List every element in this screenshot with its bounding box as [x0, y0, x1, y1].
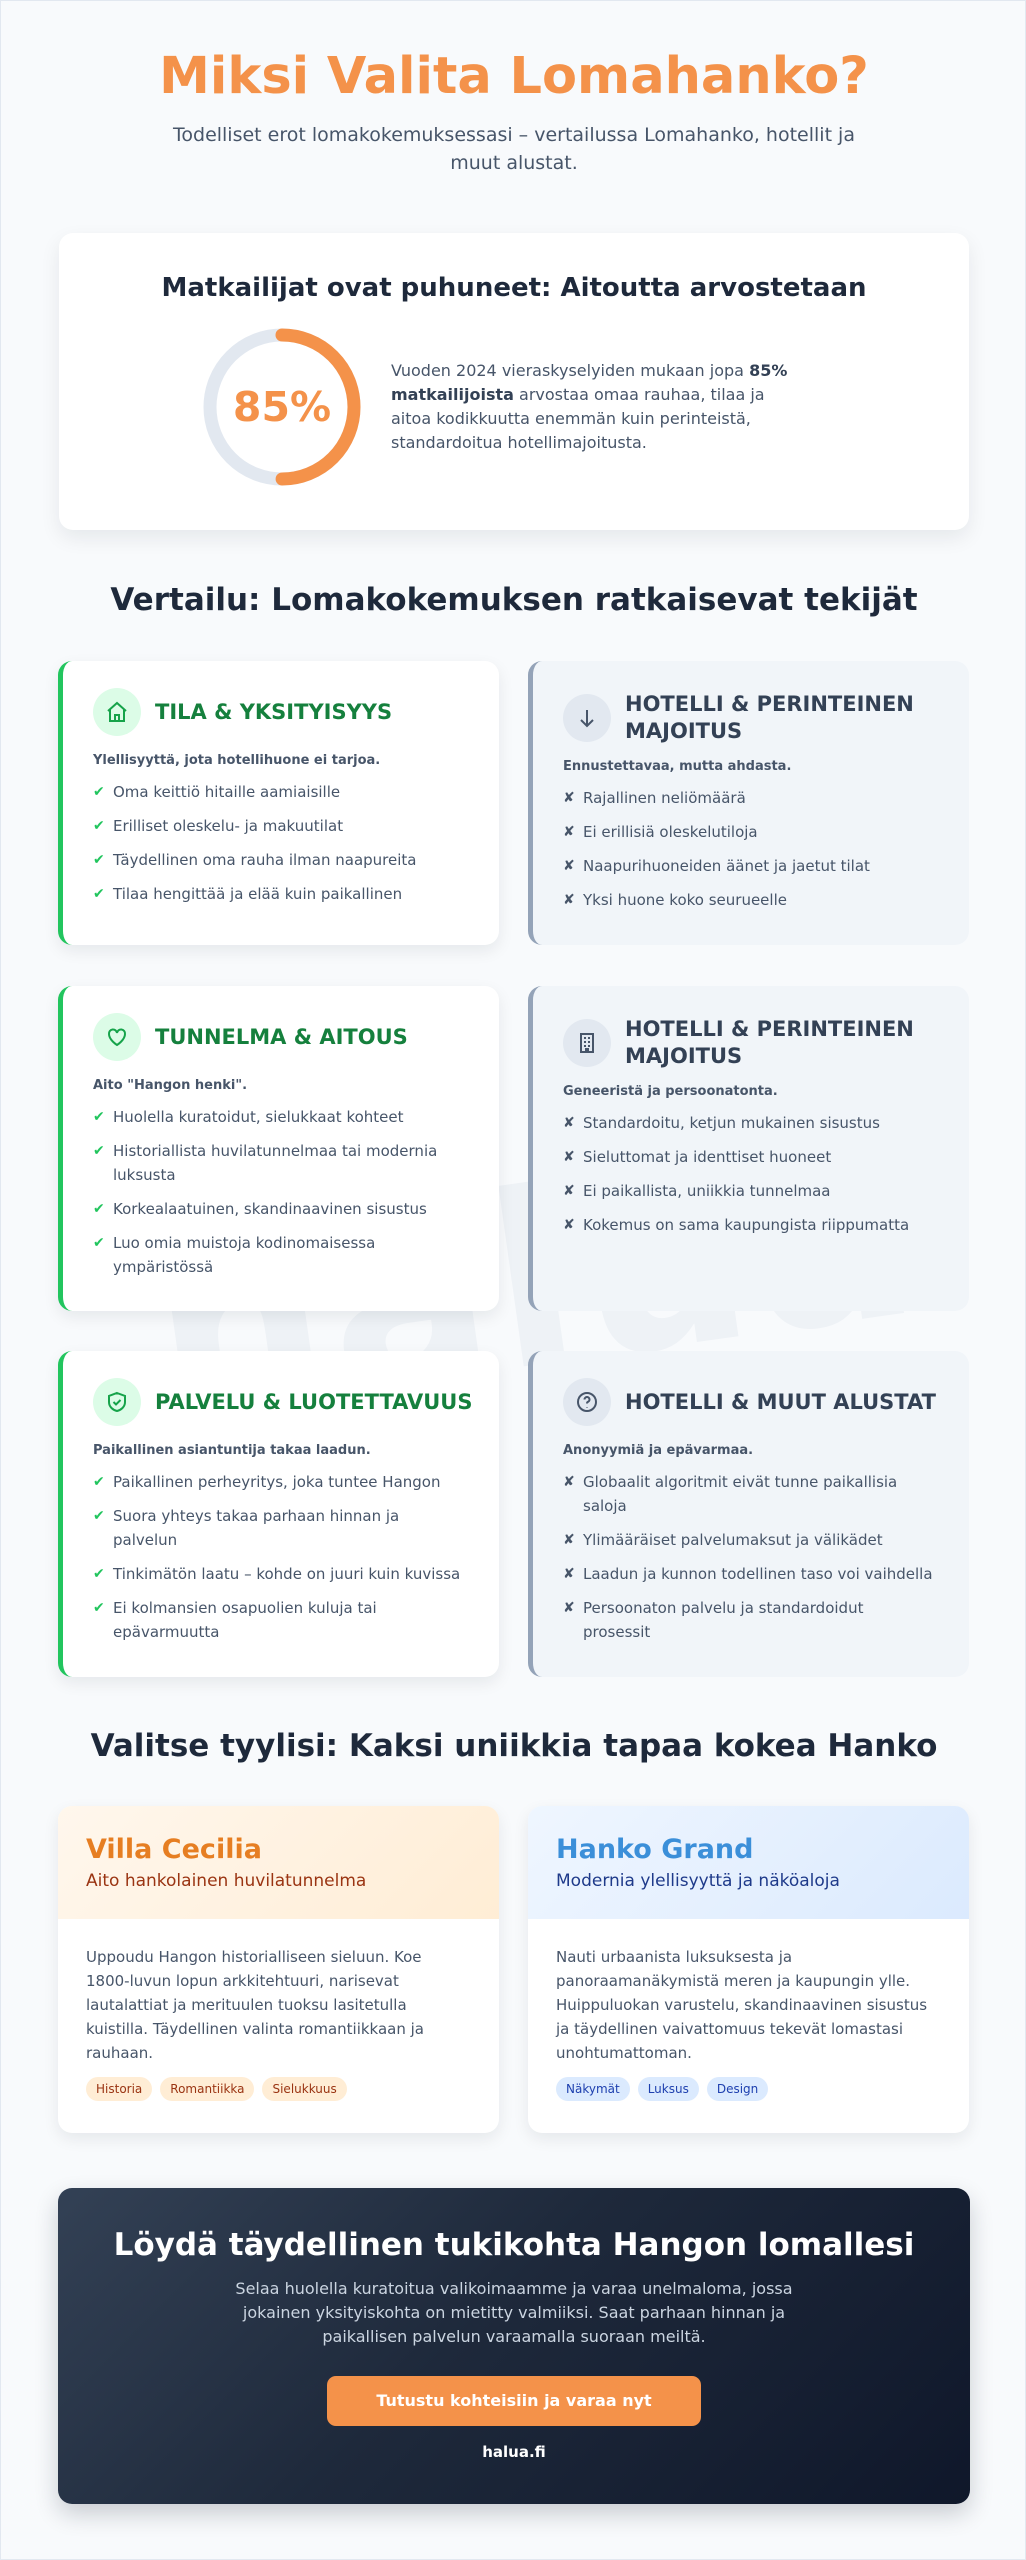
header: [563, 1017, 914, 1068]
panel: tunnelma bad: [528, 986, 969, 1311]
header villa: Aito hankolainen huvilatunnelma: [86, 1871, 366, 1891]
body villa: [86, 1948, 424, 2101]
watermark: halua: [135, 1089, 935, 1473]
body grand: Luksus: [648, 2082, 689, 2096]
subtitle: [172, 124, 855, 174]
panel: palvelu bad: Globaalit algoritmit eivät tunne paikallisia: [583, 1473, 897, 1491]
panel: tunnelma good: Aito "Hangon henki".: [93, 1078, 247, 1093]
panel: palvelu good: epävarmuutta: [113, 1623, 220, 1641]
body grand: Näkymät: [566, 2082, 620, 2096]
donut chart 85%: 85%: [233, 383, 331, 431]
stat text: matkailijoista arvostaa omaa rauhaa, tilaa ja: [391, 385, 765, 404]
header: PALVELU & LUOTETTAVUUS: [155, 1390, 472, 1414]
stat text: standardoitua hotellimajoitusta.: [391, 433, 647, 452]
donut chart 85%: [204, 328, 360, 486]
panel: tila bad: Yksi huone koko seurueelle: [583, 891, 787, 909]
panel: palvelu good: [58, 1351, 499, 1677]
body grand: unohtumattoman.: [556, 2044, 692, 2062]
panel: tila bad: Naapurihuoneiden äänet ja jaetut tilat: [583, 857, 870, 875]
panel: palvelu bad: saloja: [583, 1497, 627, 1515]
title: Miksi Valita Lomahanko?: [159, 47, 869, 106]
panel: palvelu bad: Persoonaton palvelu ja standardoidut: [583, 1599, 863, 1617]
panel: tunnelma good: Huolella kuratoidut, sielukkaat kohteet: [113, 1108, 404, 1126]
panel: Villa Cecilia: [58, 1806, 499, 2133]
stat text: Vuoden 2024 vieraskyselyiden mukaan jopa 85%: [391, 361, 787, 380]
panel: tila good: Ylellisyyttä, jota hotellihuone ei tarjoa.: [93, 753, 380, 768]
panel: tila bad: Rajallinen neliömäärä: [583, 789, 746, 807]
CTA heading: Löydä täydellinen tukikohta Hangon lomallesi: [114, 2227, 914, 2263]
panel: palvelu bad: [528, 1351, 969, 1677]
header grand: [528, 1806, 969, 1919]
header grand: Hanko Grand: [556, 1834, 753, 1865]
stat text: [391, 361, 787, 452]
panel: palvelu bad: Anonyymiä ja epävarmaa.: [563, 1443, 753, 1458]
header villa: Villa Cecilia: [86, 1834, 262, 1865]
header: [563, 1378, 936, 1426]
header: [93, 1013, 408, 1061]
panel: tila bad: [528, 661, 969, 945]
CTA button: [327, 2376, 701, 2426]
brand: halua.fi: [482, 2443, 546, 2461]
CTA text: jokainen yksityiskohta on mietitty valmiiksi. Saat parhaan hinnan ja: [243, 2303, 785, 2322]
body grand: Design: [717, 2082, 758, 2096]
panel: tunnelma bad: Sieluttomat ja identtiset huoneet: [583, 1148, 831, 1166]
panel: tunnelma bad: Standardoitu, ketjun mukainen sisustus: [583, 1114, 880, 1132]
body grand: Nauti urbaanista luksuksesta ja: [556, 1948, 792, 1966]
body villa: Historia: [96, 2082, 142, 2096]
panel: tunnelma bad: Ei paikallista, uniikkia tunnelmaa: [583, 1182, 830, 1200]
body grand: ja täydellinen vaivattomuus tekevät lomastasi: [556, 2020, 903, 2038]
panel: tila bad: Ennustettavaa, mutta ahdasta.: [563, 759, 791, 774]
CTA text: [235, 2279, 793, 2346]
panel: palvelu bad: Ylimääräiset palvelumaksut ja välikädet: [583, 1531, 883, 1549]
panel: palvelu good: palvelun: [113, 1531, 177, 1549]
CTA text: Selaa huolella kuratoitua valikoimaamme ja varaa unelmaloma, jossa: [235, 2279, 793, 2298]
panel: palvelu good: Paikallinen asiantuntija takaa laadun.: [93, 1443, 371, 1458]
panel: Hanko Grand: [528, 1806, 969, 2133]
header: [93, 1378, 472, 1426]
panel: tunnelma good: [58, 986, 499, 1311]
header: TILA & YKSITYISYYS: [155, 700, 392, 724]
panel: tila bad: Ei erillisiä oleskelutiloja: [583, 823, 758, 841]
panel: palvelu good: Ei kolmansien osapuolien kuluja tai: [113, 1599, 377, 1617]
header: HOTELLI & PERINTEINEN: [625, 692, 914, 716]
body villa: Sielukkuus: [272, 2082, 337, 2096]
panel: tila good: Erilliset oleskelu- ja makuutilat: [113, 817, 343, 835]
header: [563, 692, 914, 743]
subtitle: muut alustat.: [450, 152, 578, 174]
section heading: comparison: Vertailu: Lomakokemuksen ratkaisevat tekijät: [110, 582, 918, 618]
stat text: aitoa kodikkuutta enemmän kuin perinteistä,: [391, 409, 751, 428]
header: HOTELLI & PERINTEINEN: [625, 1017, 914, 1041]
body grand: panoraamanäkymistä meren ja kaupungin ylle.: [556, 1972, 910, 1990]
panel: palvelu bad: Laadun ja kunnon todellinen taso voi vaihdella: [583, 1565, 933, 1583]
panel: tunnelma good: Korkealaatuinen, skandinaavinen sisustus: [113, 1200, 427, 1218]
panel: tunnelma good: Luo omia muistoja kodinomaisessa: [113, 1234, 375, 1252]
header: [93, 688, 392, 736]
body villa: rauhaan.: [86, 2044, 153, 2062]
panel: tunnelma good: luksusta: [113, 1166, 176, 1184]
panel: tila good: Oma keittiö hitaille aamiaisille: [113, 783, 340, 801]
header grand: Modernia ylellisyyttä ja näköaloja: [556, 1871, 840, 1891]
panel: palvelu bad: prosessit: [583, 1623, 650, 1641]
section heading: styles: Valitse tyylisi: Kaksi uniikkia tapaa kokea Hanko: [91, 1728, 937, 1764]
panel: tunnelma good: ympäristössä: [113, 1258, 213, 1276]
panel: survey stat: [59, 233, 969, 530]
body villa: kuistilla. Täydellinen valinta romantiikkaan ja: [86, 2020, 424, 2038]
body grand: Huippuluokan varustelu, skandinaavinen sisustus: [556, 1996, 927, 2014]
stat heading: Matkailijat ovat puhuneet: Aitoutta arvostetaan: [161, 273, 867, 303]
panel: tila good: [58, 661, 499, 945]
header: TUNNELMA & AITOUS: [155, 1025, 408, 1049]
body grand: [556, 1948, 927, 2101]
panel: tunnelma good: Historiallista huvilatunnelmaa tai modernia: [113, 1142, 437, 1160]
CTA button: Tutustu kohteisiin ja varaa nyt: [376, 2391, 652, 2410]
body villa: Uppoudu Hangon historialliseen sieluun. Koe: [86, 1948, 422, 1966]
body villa: Romantiikka: [170, 2082, 244, 2096]
panel: tunnelma bad: Kokemus on sama kaupungista riippumatta: [583, 1216, 909, 1234]
header: HOTELLI & MUUT ALUSTAT: [625, 1390, 936, 1414]
body villa: 1800-luvun lopun arkkitehtuuri, narisevat: [86, 1972, 399, 1990]
body villa: lautalattiat ja merituulen tuoksu lasitetulla: [86, 1996, 407, 2014]
header: MAJOITUS: [625, 1044, 742, 1068]
panel: CTA: [58, 2188, 970, 2504]
panel: tunnelma bad: Geneeristä ja persoonatonta.: [563, 1084, 778, 1099]
panel: tila good: Tilaa hengittää ja elää kuin paikallinen: [113, 885, 402, 903]
subtitle: Todelliset erot lomakokemuksessasi – vertailussa Lomahanko, hotellit ja: [173, 124, 855, 146]
panel: tila good: Täydellinen oma rauha ilman naapureita: [113, 851, 416, 869]
panel: palvelu good: Suora yhteys takaa parhaan hinnan ja: [113, 1507, 399, 1525]
header: MAJOITUS: [625, 719, 742, 743]
header villa: [58, 1806, 499, 1919]
panel: palvelu good: Tinkimätön laatu – kohde on juuri kuin kuvissa: [113, 1565, 460, 1583]
panel: palvelu good: Paikallinen perheyritys, joka tuntee Hangon: [113, 1473, 440, 1491]
CTA text: paikallisen palvelun varaamalla suoraan meiltä.: [322, 2327, 706, 2346]
